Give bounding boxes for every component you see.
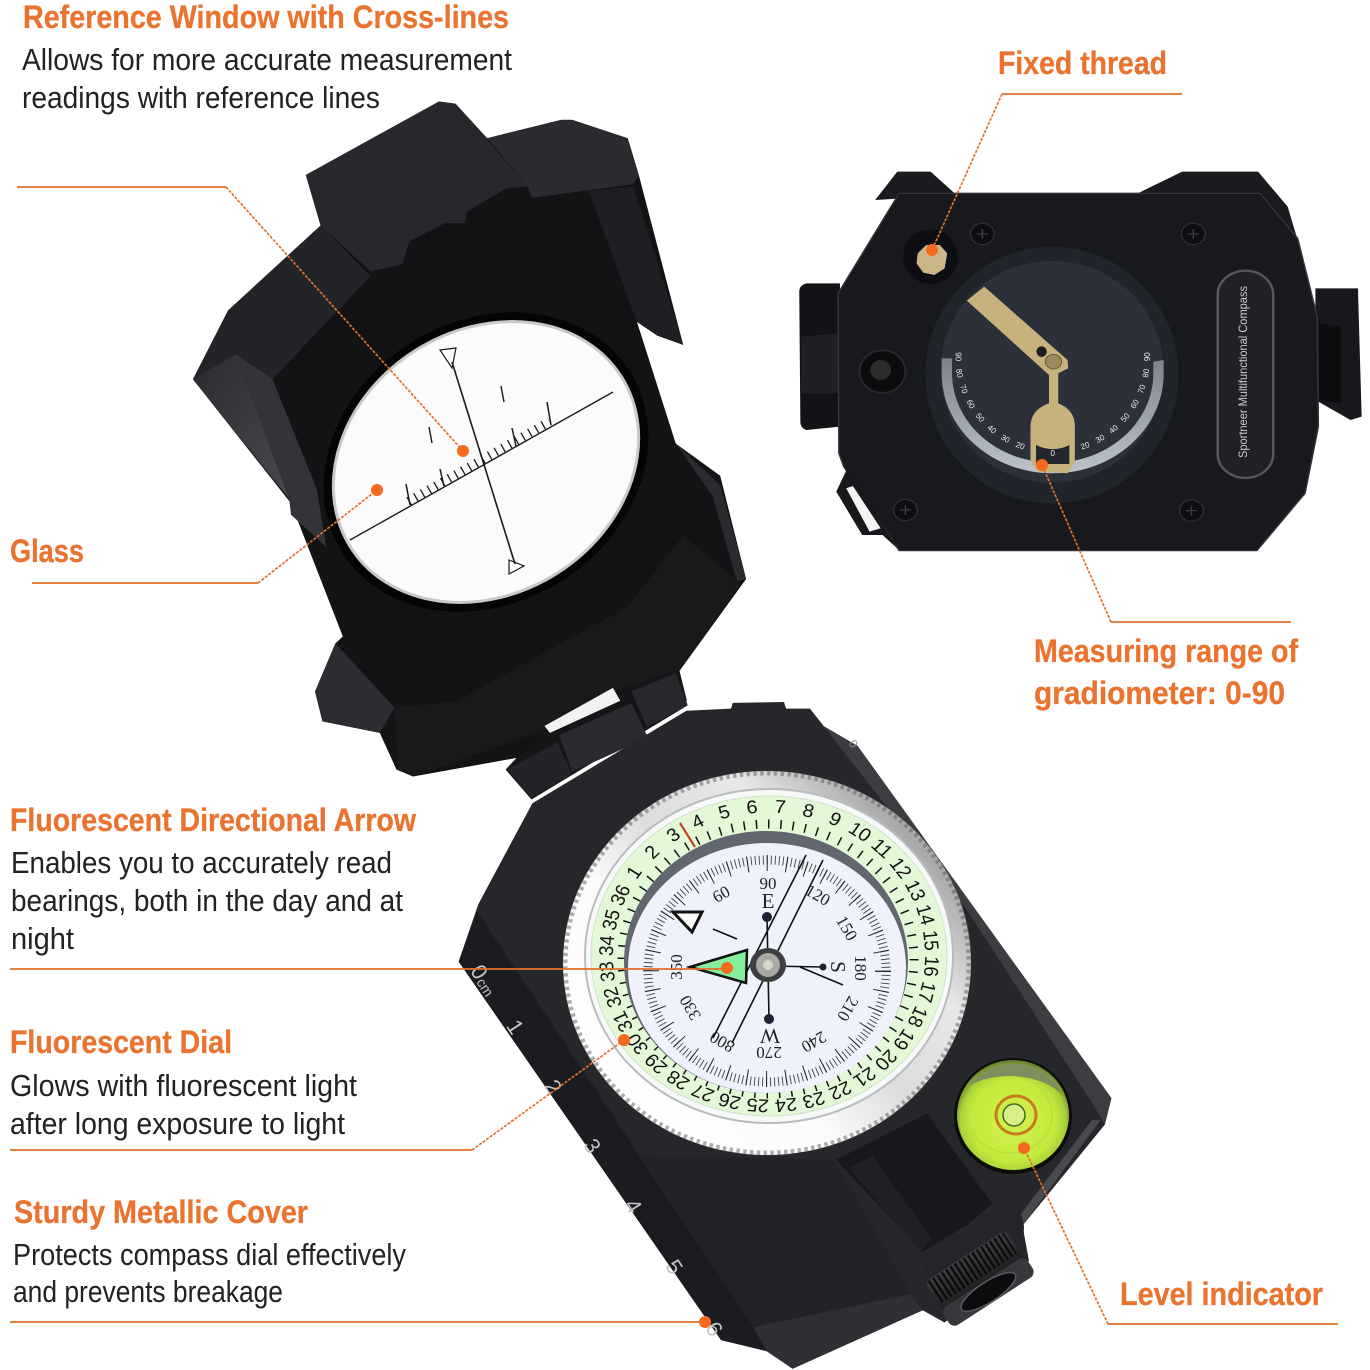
leader: level indicator — [1018, 1142, 1338, 1324]
callout: level indicator: Level indicator — [1120, 1276, 1323, 1312]
dial degree numbers: 180 — [851, 955, 870, 981]
dial degree numbers: 210 — [833, 993, 862, 1025]
callout: measuring range: Measuring range of — [1034, 633, 1298, 669]
dial degree numbers: 150 — [832, 912, 861, 944]
callout: fixed thread: Fixed thread — [998, 45, 1167, 81]
gradiometer scale numbers: 20 — [1079, 440, 1091, 452]
ring numbers: 5 — [716, 802, 733, 824]
ring numbers: 16 — [919, 955, 942, 977]
ring numbers: 3 — [663, 824, 685, 847]
gradiometer scale numbers: 30 — [999, 433, 1012, 445]
callout: glass: Glass — [10, 533, 84, 569]
callout: metallic cover: and prevents breakage — [13, 1274, 283, 1309]
dial degree numbers: 330 — [676, 992, 705, 1024]
ruler strip — [459, 911, 767, 1351]
gradiometer scale numbers: 90 — [1143, 352, 1152, 361]
callout: reference window: Reference Window with Cross-lines — [23, 0, 509, 35]
tripod hole — [860, 350, 905, 393]
sighting lines — [713, 855, 843, 1043]
base body — [459, 702, 1111, 1369]
ring numbers: 2 — [641, 842, 664, 863]
ring numbers: 7 — [774, 797, 787, 818]
callout: directional arrow: Fluorescent Directional Arrow — [10, 802, 416, 838]
compass base — [459, 702, 1111, 1369]
crosshair lines — [350, 348, 613, 574]
ruler scale: 1 — [501, 1015, 529, 1039]
callout: directional arrow: bearings, both in the day and at — [11, 883, 403, 918]
leader: fixed thread — [926, 94, 1182, 256]
compass dial — [563, 771, 971, 1155]
dial degree numbers — [667, 874, 870, 1062]
dial rim — [624, 831, 908, 1093]
ring numbers: 33 — [596, 960, 620, 983]
ruler scale: 5 — [660, 1255, 688, 1279]
ring numbers: 19 — [888, 1025, 918, 1053]
hinge barrel left — [507, 742, 572, 798]
leader: metallic cover — [10, 1316, 711, 1328]
gradiometer scale numbers: 70 — [958, 383, 970, 395]
ring numbers: 13 — [900, 877, 929, 904]
ring numbers: 26 — [716, 1088, 743, 1113]
ring numbers: 36 — [607, 882, 636, 909]
dial degree numbers: E — [762, 889, 774, 913]
ruler scale: cm — [473, 975, 497, 999]
hinge backing — [506, 671, 688, 799]
gradiometer scale numbers: 20 — [1015, 440, 1027, 452]
ring numbers: 28 — [663, 1065, 694, 1093]
ring numbers: 29 — [641, 1049, 672, 1077]
hinge slot — [544, 688, 620, 733]
gradiometer scale numbers: 0 — [1050, 449, 1055, 458]
lid top tab — [306, 101, 528, 271]
right edge marks: 0 — [846, 737, 861, 751]
name plate text: Sportneer Multifunctional Compass — [1236, 286, 1250, 458]
lower edge — [754, 1294, 923, 1369]
white triangle marker — [673, 912, 702, 932]
cardinal dots — [762, 912, 826, 1024]
dial fine ticks — [648, 860, 886, 1082]
gradiometer scale numbers: 30 — [1094, 432, 1107, 445]
dial window — [941, 261, 1163, 476]
lid left inner facet — [236, 354, 326, 547]
slide rail highlight — [849, 1155, 931, 1252]
callout: fluorescent dial: Fluorescent Dial — [10, 1024, 232, 1060]
left hinge — [799, 283, 840, 430]
callout: reference window: readings with reference lines — [22, 80, 380, 115]
slide block — [836, 1113, 992, 1252]
brass clinometer needle — [967, 287, 1075, 473]
leader: reference window — [17, 187, 469, 457]
dial degree numbers: W — [760, 1024, 780, 1048]
lower panel — [641, 1155, 912, 1327]
dial long ticks — [651, 863, 883, 1079]
callout: reference window: Allows for more accurate measurement — [22, 42, 512, 77]
gradiometer scale numbers: 60 — [1129, 398, 1141, 410]
ruler scale: 0 — [465, 960, 493, 984]
leader: directional arrow — [10, 962, 733, 974]
lid left facet — [193, 354, 289, 499]
lid upper left wall — [193, 225, 371, 379]
ring numbers: 23 — [800, 1087, 827, 1112]
ruler scale: 4 — [619, 1194, 647, 1218]
lanyard loop — [836, 468, 897, 548]
screws — [894, 223, 1205, 521]
ring numbers: 31 — [609, 1008, 638, 1035]
callout: directional arrow — [10, 802, 416, 956]
silver bezel — [563, 771, 971, 1155]
ring numbers: 6 — [745, 797, 759, 819]
ring numbers: 8 — [800, 801, 816, 823]
callout: fluorescent dial: Glows with fluorescent light — [10, 1068, 357, 1103]
glass — [280, 265, 692, 659]
level indicator vial — [954, 1058, 1072, 1174]
ring numbers: 12 — [884, 854, 915, 883]
ring numbers: 9 — [825, 809, 844, 831]
ring numbers: 21 — [849, 1062, 879, 1091]
ring numbers: 34 — [596, 934, 619, 957]
compass lid — [193, 101, 746, 799]
lid right lower wall — [676, 444, 746, 581]
fluorescent ring — [591, 796, 947, 1116]
white dial — [628, 843, 906, 1093]
ruler scale: 3 — [578, 1134, 606, 1158]
top ears — [875, 172, 956, 200]
lid silhouette — [193, 101, 746, 777]
ruler scale — [465, 960, 728, 1341]
dial centre clean — [659, 871, 875, 1071]
gradiometer scale numbers: 80 — [954, 368, 965, 379]
ring numbers: 1 — [623, 863, 647, 883]
gradiometer scale numbers: 90 — [953, 352, 962, 362]
ring ticks — [622, 824, 914, 1094]
ring numbers: 25 — [746, 1094, 770, 1115]
gradiometer scale band — [942, 358, 1164, 473]
dial degree numbers: 270 — [756, 1043, 782, 1062]
mirror rim — [267, 252, 705, 672]
gradiometer scale numbers — [953, 352, 1152, 458]
ring numbers: 14 — [911, 902, 938, 928]
ring numbers: 10 — [844, 819, 875, 847]
lid lower wedge — [315, 643, 395, 733]
callout: measuring range — [1034, 633, 1298, 711]
leader: measuring range — [1036, 459, 1291, 622]
ring numbers: 27 — [689, 1079, 718, 1105]
thread socket — [903, 229, 958, 284]
rear view compass — [799, 172, 1362, 551]
ruler scale: 6 — [700, 1317, 728, 1341]
hinge barrel middle — [559, 703, 648, 772]
callout: metallic cover: Sturdy Metallic Cover — [14, 1194, 308, 1230]
callout: directional arrow: Enables you to accurately read — [11, 845, 392, 880]
centre pivot — [750, 948, 786, 982]
gradiometer scale numbers: 40 — [985, 423, 998, 436]
gradiometer scale numbers: 80 — [1141, 367, 1151, 378]
dial degree numbers: 60 — [709, 882, 733, 907]
ring numbers: 32 — [600, 984, 627, 1010]
ring numbers: 22 — [825, 1076, 855, 1103]
callout: measuring range: gradiometer: 0-90 — [1034, 675, 1285, 711]
callout: fluorescent dial: after long exposure to light — [10, 1106, 345, 1141]
callout: directional arrow: night — [11, 921, 74, 956]
callout: fluorescent dial — [10, 1024, 357, 1141]
glass ring — [585, 789, 953, 1123]
name plate — [1218, 271, 1273, 478]
knurled edge — [565, 773, 969, 1153]
ring numbers: 35 — [599, 908, 625, 932]
callout: metallic cover — [13, 1194, 406, 1309]
dial recess — [925, 247, 1178, 503]
hinge barrel right — [631, 673, 688, 727]
dial degree numbers: 120 — [802, 881, 834, 910]
right edge strip — [824, 726, 1111, 1125]
back plate — [838, 193, 1318, 551]
ring numbers — [596, 797, 942, 1115]
gradiometer scale numbers: 50 — [974, 411, 987, 424]
dial degree numbers: 800 — [706, 1027, 738, 1056]
leader: fluorescent dial — [10, 1034, 630, 1150]
red index line — [680, 823, 695, 847]
dial degree numbers: S — [826, 961, 850, 973]
leader: glass — [32, 484, 383, 583]
ring numbers: 11 — [866, 835, 896, 863]
callout: metallic cover: Protects compass dial effectively — [13, 1237, 406, 1272]
lid bottom band — [395, 535, 741, 777]
ring numbers: 24 — [773, 1093, 798, 1115]
ring numbers: 18 — [902, 1003, 931, 1030]
ring numbers: 15 — [918, 929, 942, 952]
gradiometer scale numbers: 70 — [1136, 383, 1148, 395]
right latch — [1315, 288, 1362, 420]
ruler scale: 2 — [539, 1075, 567, 1099]
needle window — [1036, 445, 1069, 464]
gradiometer scale numbers: 60 — [964, 398, 977, 411]
gradiometer scale numbers: 50 — [1119, 411, 1132, 424]
callout: reference window — [22, 0, 512, 115]
lid top right cap — [487, 120, 639, 198]
needle pivot — [1045, 354, 1062, 369]
brass fixed thread — [917, 245, 947, 275]
dial degree numbers: 240 — [798, 1027, 830, 1056]
knob — [921, 1207, 1036, 1328]
gradiometer scale numbers: 40 — [1107, 423, 1120, 436]
ring numbers: 20 — [870, 1045, 901, 1074]
ring numbers: 30 — [623, 1029, 654, 1058]
ring numbers: 17 — [913, 980, 939, 1004]
needle slot — [1036, 346, 1047, 357]
ring numbers: 4 — [688, 811, 708, 834]
lid right flap — [589, 186, 683, 345]
dial degree numbers: 90 — [760, 874, 776, 893]
fluorescent directional arrow — [690, 950, 747, 983]
dial degree numbers: 350 — [667, 954, 686, 980]
